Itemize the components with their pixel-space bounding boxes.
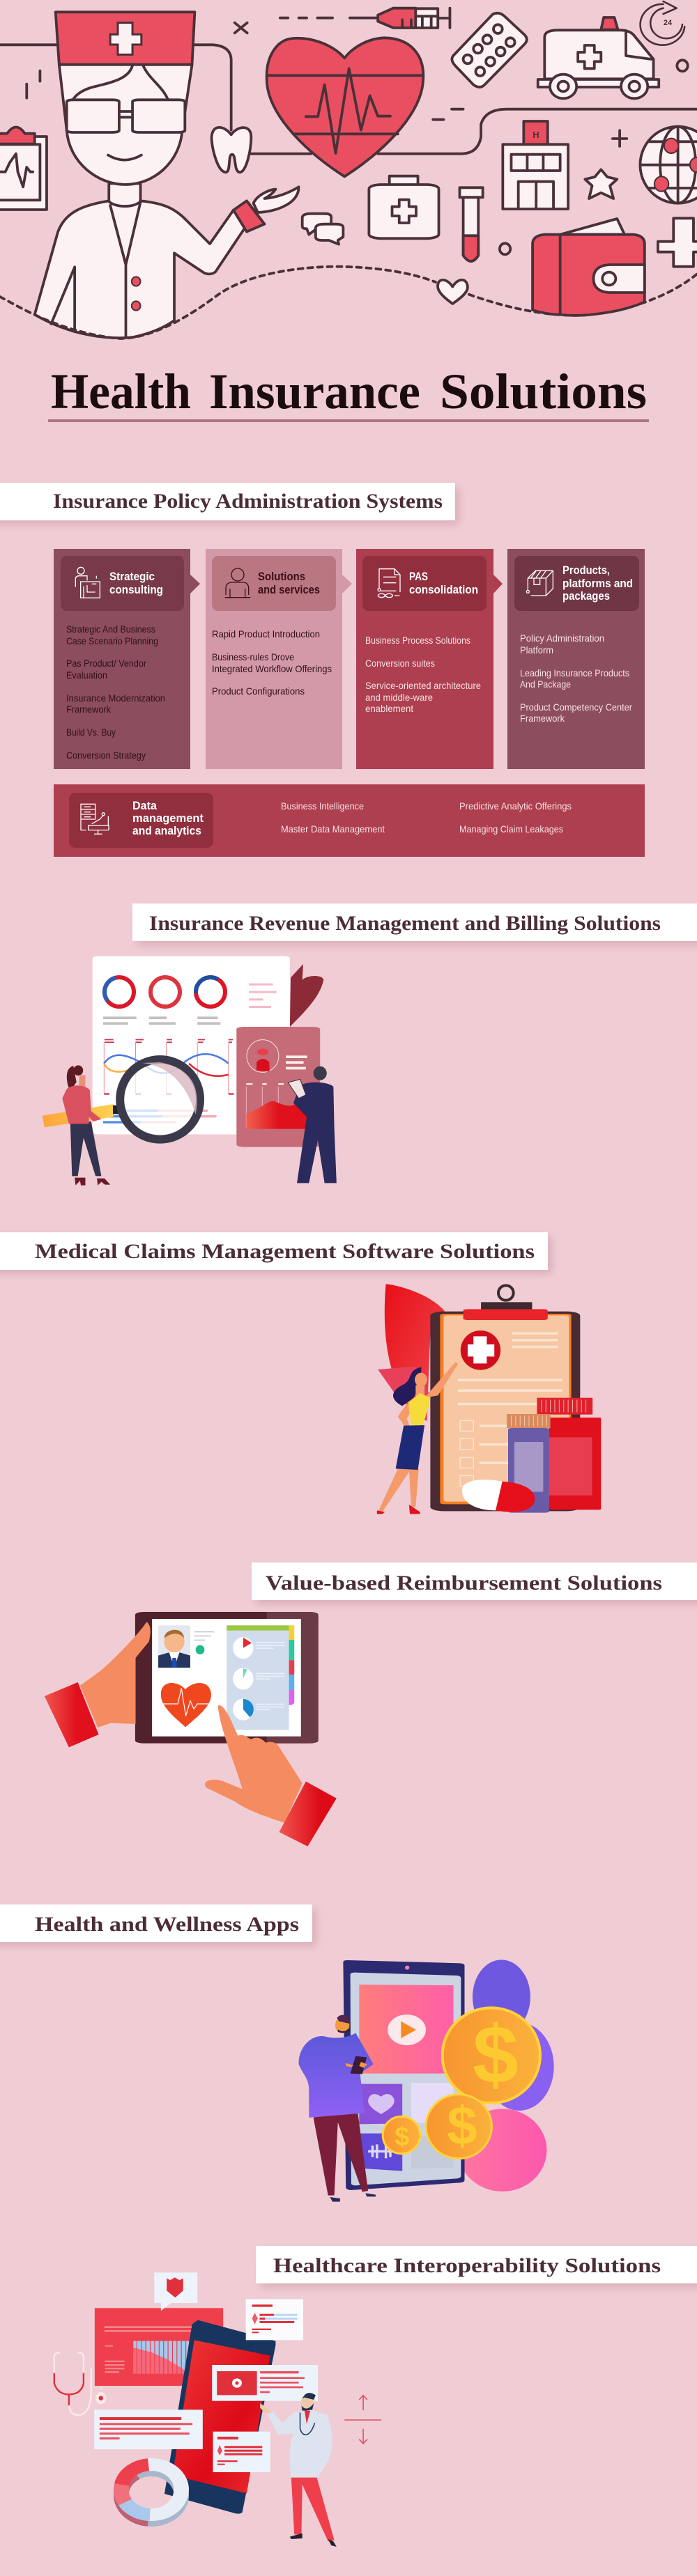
- phone with app screen: [343, 1960, 465, 2190]
- icon: chat bubbles: [302, 214, 343, 245]
- section heading: Insurance Policy Administration Systems: [0, 483, 455, 520]
- bar: data management and analytics: and analytics: [132, 825, 201, 837]
- bar: data management and analytics: Managing Claim Leakages: [459, 823, 563, 835]
- coin symbols: [395, 2009, 519, 2156]
- medicine bottles: [507, 1398, 601, 1513]
- main title: Insurance: [209, 364, 420, 419]
- woman pointing: [377, 1362, 458, 1514]
- bar: data management and analytics: Predictive Analytic Offerings: [459, 800, 572, 812]
- section heading: Value-based Reimbursement Solutions: [252, 1562, 697, 1600]
- illustration: medical claims clipboard: [377, 1284, 601, 1514]
- section heading: Value-based Reimbursement Solutions: Value-based Reimbursement Solutions: [266, 1572, 662, 1595]
- bar: data management and analytics: Master Data Management: [281, 823, 385, 835]
- icon: tooth: [212, 127, 251, 172]
- red report panel: [95, 2308, 223, 2386]
- section heading: Healthcare Interoperability Solutions: Healthcare Interoperability Solutions: [273, 2254, 661, 2277]
- section heading: Health and Wellness Apps: Health and Wellness Apps: [35, 1913, 299, 1936]
- column: products, platforms and packages: Policy Administration: [520, 633, 604, 644]
- column: strategic consulting: Pas Product/ Vendor: [66, 658, 146, 669]
- section heading: Insurance Revenue Management and Billing Solutions: Insurance Revenue Management and Billing Solutions: [149, 912, 661, 935]
- column: PAS consolidation: Business Process Solutions: [365, 635, 470, 646]
- column: strategic consulting: Strategic And Business: [66, 623, 155, 635]
- column: solutions and services: Business-rules Drove: [212, 651, 294, 662]
- column: products, platforms and packages: And Package: [520, 678, 571, 690]
- icon: hospital: [503, 121, 568, 209]
- section heading: Medical Claims Management Software Solutions: [0, 1232, 548, 1270]
- bar: data management and analytics: management: [132, 812, 204, 825]
- column: PAS consolidation: and middle-ware: [365, 692, 433, 703]
- data card: video: [212, 2365, 318, 2401]
- column: PAS consolidation: Service-oriented architecture: [365, 680, 481, 691]
- column: solutions and services: Product Configurations: [212, 685, 305, 697]
- illustration: wellness app with coins: [299, 1960, 554, 2202]
- icon: clipboard with pulse: [0, 127, 47, 210]
- column: products, platforms and packages: Platform: [520, 644, 553, 655]
- heart with pulse: [161, 1683, 211, 1727]
- stethoscope: [54, 2352, 106, 2415]
- column: PAS consolidation: consolidation: [409, 584, 478, 596]
- icon: big heart with pulse: [267, 38, 423, 176]
- data card: lower: [213, 2432, 270, 2472]
- illustration: tablet held in hands: [45, 1612, 337, 1847]
- column: PAS consolidation: [356, 549, 503, 769]
- main title: [48, 364, 649, 422]
- donut rings: [105, 977, 225, 1007]
- column: strategic consulting: Case Scenario Planning: [66, 635, 158, 646]
- capsule: [462, 1480, 535, 1512]
- icon: syringe: [378, 8, 450, 28]
- column: products, platforms and packages: [507, 549, 645, 769]
- column: products, platforms and packages: Product Competency Center: [520, 701, 632, 713]
- clipboard: [430, 1285, 580, 1511]
- scale arrows: [344, 2396, 381, 2444]
- profile card: [236, 1027, 320, 1147]
- column: strategic consulting: Conversion Strategy: [66, 750, 146, 761]
- column: products, platforms and packages: Framework: [520, 713, 565, 724]
- left hand and cuff: [45, 1622, 151, 1747]
- column: solutions and services: and services: [258, 584, 320, 596]
- coin symbols: $: [395, 2123, 410, 2152]
- column: strategic consulting: Build Vs. Buy: [66, 727, 116, 738]
- section heading: Healthcare Interoperability Solutions: [256, 2246, 697, 2283]
- tablet device: [135, 1612, 319, 1744]
- magnifying glass: [43, 1060, 200, 1140]
- bar: data management and analytics: Data: [132, 800, 158, 812]
- section heading: Insurance Revenue Management and Billing Solutions: [132, 903, 697, 941]
- label: hospital H: H: [533, 130, 539, 140]
- chart panel with pies: [227, 1625, 294, 1730]
- icon: star: [585, 169, 617, 199]
- column: solutions and services: Rapid Product Introduction: [212, 628, 320, 639]
- coin symbols: $: [473, 2009, 519, 2101]
- background blobs: [458, 1960, 554, 2191]
- section heading: Health and Wellness Apps: [0, 1904, 312, 1942]
- data card: top right: [246, 2299, 303, 2340]
- column: solutions and services: Solutions: [258, 571, 305, 583]
- bar: data management and analytics: [54, 784, 645, 857]
- doctor with stethoscope: [260, 2393, 337, 2547]
- icon: globe: [640, 127, 697, 203]
- doctor figure: [35, 12, 299, 338]
- icon: small heart: [438, 280, 468, 304]
- section heading: Medical Claims Management Software Solutions: Medical Claims Management Software Solutions: [35, 1240, 535, 1263]
- column: strategic consulting: Insurance Modernization: [66, 692, 165, 704]
- icon: first aid kit: [369, 176, 439, 238]
- column: products, platforms and packages: Leading Insurance Products: [520, 667, 629, 678]
- woman: [62, 1065, 110, 1186]
- icon: large plus: [658, 218, 697, 267]
- section heading: Insurance Policy Administration Systems: Insurance Policy Administration Systems: [53, 490, 443, 513]
- main title: Solutions: [440, 364, 647, 419]
- doctor cap with cross: [56, 12, 194, 65]
- column: strategic consulting: Framework: [66, 704, 112, 715]
- column: PAS consolidation: PAS: [409, 571, 428, 583]
- gold coins: [383, 2008, 540, 2159]
- man with phone: [299, 2015, 376, 2202]
- illustration: healthcare interoperability: [54, 2272, 381, 2547]
- column: PAS consolidation: enablement: [365, 703, 413, 714]
- main title: Health: [51, 364, 191, 419]
- column: products, platforms and packages: Products,: [562, 564, 610, 577]
- column: products, platforms and packages: platforms and: [562, 577, 633, 590]
- speech bubble with shield: [154, 2272, 197, 2311]
- column: strategic consulting: consulting: [109, 584, 163, 596]
- icon: wallet: [533, 219, 645, 316]
- column: products, platforms and packages: packages: [562, 590, 610, 603]
- icon: ambulance: [538, 17, 659, 98]
- man with tablet: [288, 1066, 337, 1183]
- icon: 24 hour arrow ring: [641, 1, 684, 45]
- column: solutions and services: [206, 549, 352, 769]
- column: solutions and services: Integrated Workflow Offerings: [212, 663, 332, 674]
- hero illustration: doctor and medical icons: [0, 1, 697, 339]
- icon: pill blister: [452, 13, 527, 87]
- decorative rings: [500, 60, 688, 254]
- dashed path: [0, 267, 697, 339]
- column: strategic consulting: [54, 549, 200, 769]
- column: strategic consulting: Strategic: [109, 571, 155, 583]
- bar: data management and analytics: Business Intelligence: [281, 800, 364, 812]
- illustration: revenue dashboard with magnifier: [43, 956, 337, 1186]
- doctor profile: [158, 1625, 214, 1668]
- label: 24 on ring: 24: [664, 19, 673, 27]
- panel: process flow: [54, 549, 645, 857]
- connecting lines: [0, 18, 697, 154]
- column: PAS consolidation: Conversion suites: [365, 658, 435, 669]
- column: strategic consulting: Evaluation: [66, 669, 107, 681]
- dashboard board: [93, 956, 323, 1134]
- coin symbols: $: [447, 2095, 477, 2156]
- data card: lower left: [94, 2410, 203, 2449]
- phone: [164, 2320, 275, 2514]
- right hand and cuff: [205, 1705, 337, 1847]
- leaves: [378, 1284, 445, 1421]
- 3D donut chart: [121, 2465, 181, 2520]
- icon: test tube: [459, 187, 483, 261]
